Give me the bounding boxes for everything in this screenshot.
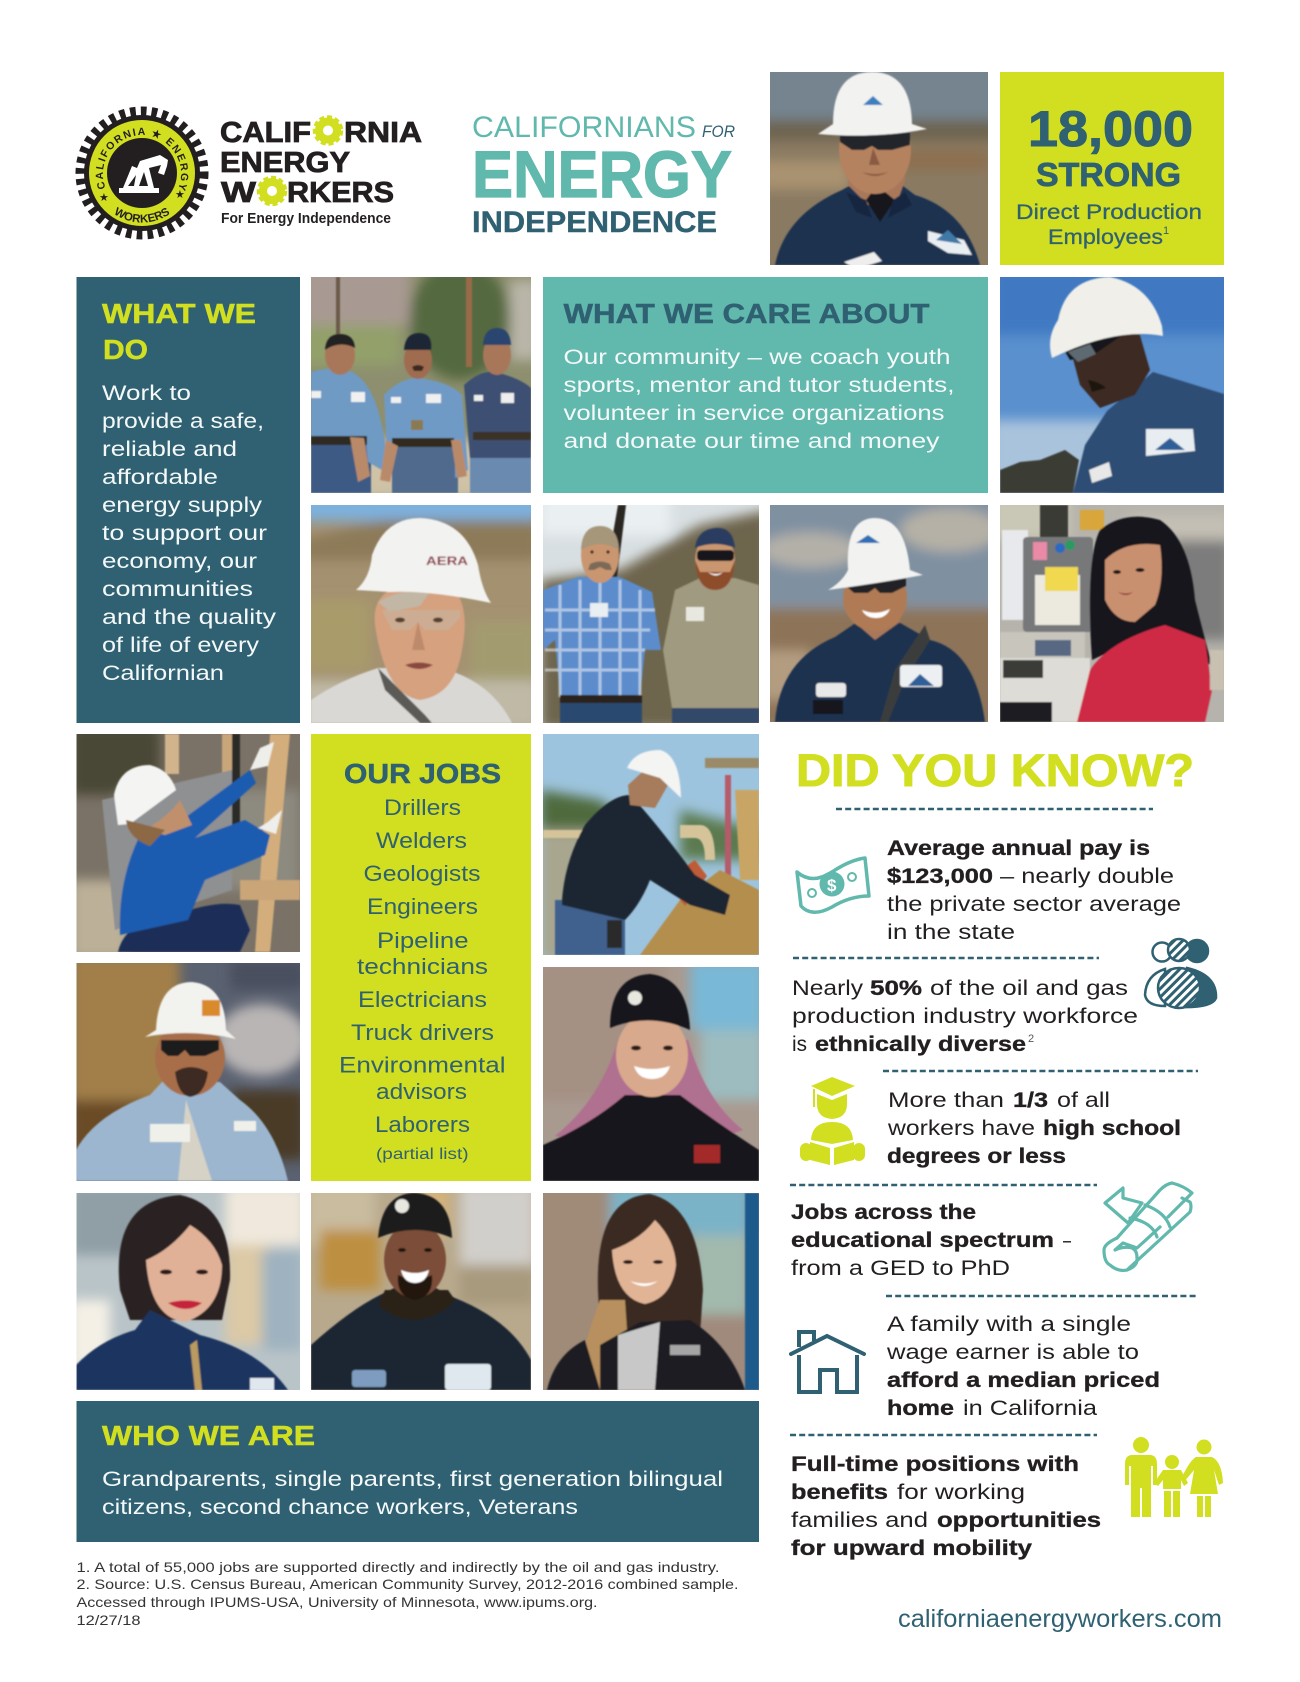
list: jobs: Environmental: [339, 1052, 506, 1078]
photo: man in light blue shirt and hard hat: [70, 955, 308, 1181]
list: jobs: [339, 795, 506, 1163]
logo wordmark: [220, 117, 422, 209]
heading: what we do: [102, 298, 256, 365]
text: ethnically diverse: [792, 977, 1138, 1056]
text: what we do body: of life of every: [102, 634, 260, 657]
text: what we do body: Work to: [102, 382, 191, 405]
text: what we do body: economy, our: [102, 550, 257, 573]
text: average annual pay: [887, 837, 1181, 944]
photo: two men in plaid and khaki shirts: [543, 505, 759, 723]
text: what we do body: Californian: [102, 662, 224, 685]
list: jobs: Welders: [376, 828, 467, 853]
text: educational spectrum: Jobs across the: [791, 1201, 976, 1224]
photo: smiling worker with strap: [770, 505, 988, 722]
photo: worker with sunglasses and hard hat: [770, 72, 988, 265]
footnotes: [76, 1559, 738, 1628]
logo: Californians for Energy Independence: [472, 111, 735, 239]
icon: house: [791, 1332, 864, 1392]
logo wordmark: ENERGY: [220, 147, 350, 179]
photo: worker looking down against blue sky: [1000, 277, 1224, 493]
text: who we are body: citizens, second chance workers, Veterans: [102, 1496, 578, 1519]
text: full-time positions: opportunities: [937, 1509, 1101, 1532]
icon: gear badge: CALIFORNIA ★ ENERGY: [96, 128, 188, 192]
text: average annual pay: in the state: [887, 921, 1015, 944]
icon: family: [1125, 1437, 1223, 1517]
text: ethnically diverse: Nearly: [792, 977, 864, 1000]
photo: woman in black jacket with long hair: [535, 1185, 759, 1395]
text: ethnically diverse: of the oil and gas: [930, 977, 1128, 1000]
stat panel: 18,000 strong: Direct Production: [1016, 201, 1202, 224]
text: full-time positions: [791, 1453, 1101, 1560]
list: jobs: Pipeline: [377, 928, 468, 953]
stat panel: 18,000 strong: 1: [1163, 225, 1169, 237]
heading: our jobs: OUR JOBS: [344, 758, 501, 789]
heading: what we do: WHAT WE: [102, 298, 256, 329]
list: jobs: Electricians: [358, 987, 487, 1012]
panel: what we care about: [543, 277, 988, 493]
text: afford a home: home: [887, 1397, 954, 1420]
text: average annual pay: Average annual pay is: [887, 837, 1150, 860]
fact: afford a home: [791, 1313, 1160, 1420]
icon: gear badge: WORKERS: [115, 206, 170, 223]
logo wordmark: CALIF: [220, 117, 311, 149]
text: educational spectrum: educational spectrum: [791, 1229, 1054, 1252]
text: ethnically diverse: 50%: [870, 977, 922, 1000]
text: high school degrees: [887, 1089, 1181, 1168]
stat panel: 18,000 strong: STRONG: [1036, 156, 1181, 193]
text: full-time positions: benefits: [791, 1481, 888, 1504]
text: who we are body: [102, 1468, 723, 1519]
stat panel: 18,000 strong: Employees: [1048, 226, 1163, 249]
text: afford a home: wage earner is able to: [886, 1341, 1139, 1364]
icon: gear letter O top: [314, 117, 342, 144]
logo: Californians for Energy Independence: FOR: [702, 122, 735, 141]
photo: three workers in blue shirts: [311, 277, 531, 493]
photo: woman in red shirt at office desk: [1000, 505, 1224, 722]
text: what we care about body: Our community – we coach youth: [564, 346, 950, 369]
photo: man in hard hat with Aera logo: AERA: [426, 554, 468, 568]
text: what we do body: and the quality: [102, 606, 277, 629]
website url: californiaenergyworkers.com: [898, 1605, 1222, 1633]
text: high school degrees: degrees or less: [887, 1145, 1066, 1168]
text: average annual pay: the private sector average: [887, 893, 1181, 916]
text: full-time positions: families and: [791, 1509, 928, 1532]
panel: what we do: [76, 277, 300, 723]
photo: man in hard hat with Aera logo: [311, 505, 531, 723]
icon: gear badge: ★: [175, 189, 185, 201]
text: full-time positions: for upward mobility: [791, 1537, 1032, 1560]
icon: graduate reading book: [800, 1077, 865, 1165]
icon: diverse people: [1145, 939, 1216, 1008]
list: jobs: Drillers: [384, 795, 461, 820]
logo tagline: For Energy Independence: [221, 211, 391, 227]
icon: dollar bill: [797, 858, 869, 912]
list: jobs: Laborers: [375, 1112, 470, 1137]
fact: full-time positions: [791, 1437, 1223, 1560]
heading: what we care about: WHAT WE CARE ABOUT: [564, 298, 930, 329]
list: jobs: Engineers: [367, 894, 478, 919]
logo: Californians for Energy Independence: CALIFORNIANS: [472, 111, 696, 144]
text: high school degrees: workers have: [887, 1117, 1035, 1140]
list: jobs: advisors: [376, 1079, 467, 1104]
text: what we do body: affordable: [102, 466, 218, 489]
text: what we care about body: [564, 346, 954, 453]
logo: Californians for Energy Independence: INDEPENDENCE: [472, 206, 717, 239]
text: ethnically diverse: is: [792, 1033, 807, 1056]
text: what we do body: energy supply: [102, 494, 263, 517]
text: high school degrees: high school: [1043, 1117, 1181, 1140]
footnotes: Accessed through IPUMS-USA, University of Minnesota, www.ipums.org.: [76, 1594, 598, 1610]
logo: Californians for Energy Independence: ENERGY: [472, 137, 732, 211]
text: ethnically diverse: 2: [1028, 1033, 1034, 1045]
text: average annual pay: – nearly double: [1000, 865, 1174, 888]
logo wordmark: W: [221, 177, 257, 209]
stat panel: 18,000 strong: 18,000: [1028, 101, 1193, 157]
text: what we care about body: and donate our time and money: [564, 430, 940, 453]
text: what we do body: provide a safe,: [102, 410, 264, 433]
logo: California Energy Workers: [76, 106, 422, 240]
list: jobs: (partial list): [376, 1146, 468, 1163]
text: what we do body: reliable and: [102, 438, 237, 461]
list: jobs: technicians: [357, 954, 488, 979]
text: high school degrees: More than: [888, 1089, 1004, 1112]
text: afford a home: afford a median priced: [887, 1369, 1160, 1392]
stat panel: 18,000 strong: [1000, 72, 1224, 265]
text: ethnically diverse: ethnically diverse: [815, 1033, 1026, 1056]
text: what we do body: [102, 382, 277, 685]
text: ethnically diverse: production industry workforce: [792, 1005, 1138, 1028]
photo: woman in navy jacket: [70, 1185, 305, 1390]
text: educational spectrum: –: [1063, 1229, 1071, 1252]
logo wordmark: RKERS: [287, 177, 394, 209]
text: what we care about body: sports, mentor and tutor students,: [564, 374, 954, 397]
icon: gear letter O bottom: [258, 178, 286, 204]
list: jobs: Geologists: [364, 861, 480, 886]
fact: average annual pay: [797, 837, 1181, 944]
text: high school degrees: 1/3: [1013, 1089, 1048, 1112]
text: full-time positions: for working: [897, 1481, 1025, 1504]
panel: who we are: [76, 1401, 759, 1542]
text: educational spectrum: from a GED to PhD: [791, 1257, 1010, 1280]
photo: smiling man in black cap: [305, 1185, 535, 1390]
fact: high school degrees: [800, 1077, 1181, 1168]
icon: gear badge: [76, 106, 208, 240]
footnotes: 1. A total of 55,000 jobs are supported directly and indirectly by the oil and gas industry.: [76, 1559, 720, 1575]
text: what we do body: communities: [102, 578, 253, 601]
icon: diploma scroll: [1104, 1183, 1192, 1270]
fact: ethnically diverse workforce: [792, 939, 1216, 1056]
heading: did you know: DID YOU KNOW?: [796, 745, 1194, 796]
logo wordmark: RNIA: [344, 117, 422, 149]
footnotes: 12/27/18: [76, 1612, 141, 1628]
text: who we are body: Grandparents, single parents, first generation bilingual: [102, 1468, 723, 1491]
icon: dollar bill: $: [827, 876, 837, 895]
text: afford a home: in California: [963, 1397, 1097, 1420]
text: what we care about body: volunteer in service organizations: [564, 402, 944, 425]
heading: who we are: WHO WE ARE: [102, 1420, 315, 1451]
photo: man working on pipeline valves: [540, 734, 760, 960]
text: afford a home: [886, 1313, 1160, 1420]
text: educational spectrum: [791, 1201, 1071, 1280]
icon: gear badge: ★: [99, 192, 109, 204]
text: full-time positions: Full-time positions with: [791, 1453, 1079, 1476]
list: jobs: Truck drivers: [351, 1020, 494, 1045]
text: what we do body: to support our: [102, 522, 267, 545]
photo: woman in blue jacket climbing fence: [70, 725, 300, 960]
fact: educational spectrum: [791, 1183, 1192, 1280]
footnotes: 2. Source: U.S. Census Bureau, American Community Survey, 2012-2016 combined sample.: [76, 1576, 738, 1592]
text: afford a home: A family with a single: [887, 1313, 1131, 1336]
panel: our jobs: [311, 734, 531, 1181]
photo: woman in black cap with pink hair: [535, 960, 765, 1181]
heading: what we do: DO: [103, 334, 148, 365]
text: high school degrees: of all: [1057, 1089, 1110, 1112]
text: average annual pay: $123,000: [887, 865, 993, 888]
